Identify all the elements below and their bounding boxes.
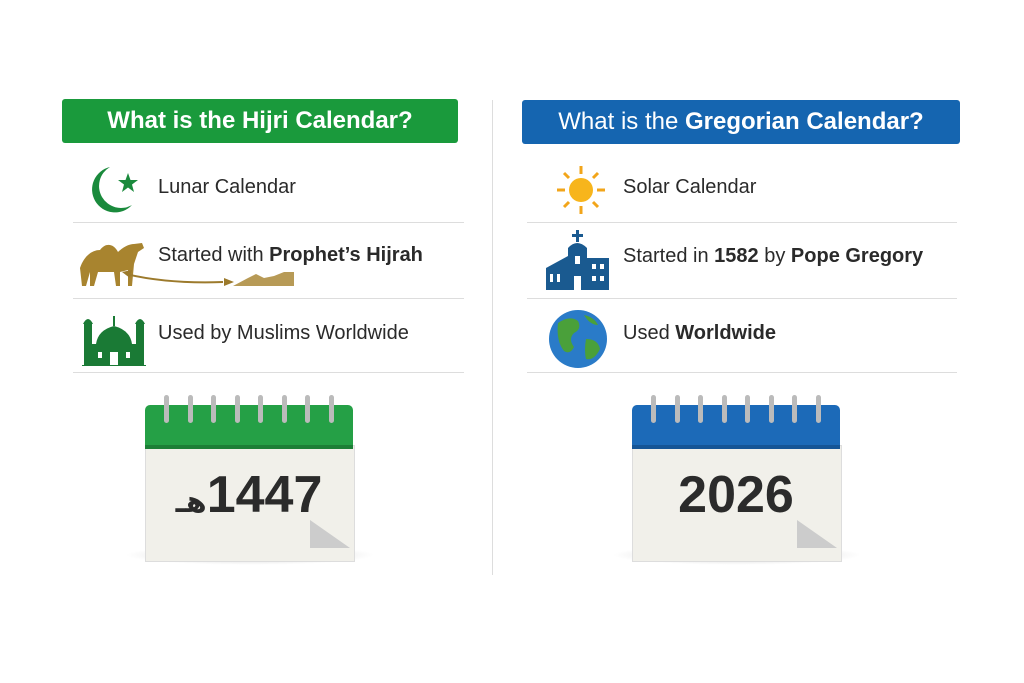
- icon: camel with arrow: [80, 243, 294, 286]
- text: muslims: Used by Muslims Worldwide: [158, 322, 409, 344]
- icon: globe: [549, 310, 607, 368]
- text: pope: Started in 1582 by Pope Gregory: [623, 245, 923, 267]
- text: solar: Solar Calendar: [623, 176, 756, 198]
- text: hijrah: Started with Prophet’s Hijrah: [158, 244, 423, 266]
- text: lunar: Lunar Calendar: [158, 176, 296, 198]
- icon: crescent and star: [92, 167, 138, 212]
- text: worldwide: Used Worldwide: [623, 322, 776, 344]
- heading: Gregorian: What is the Gregorian Calendar?: [558, 108, 924, 135]
- icon: sun: [557, 166, 605, 214]
- calendar: 1447: هـ1447: [176, 466, 322, 524]
- calendar: 2026: 2026: [678, 466, 794, 524]
- calendar: 1447: [145, 395, 355, 564]
- heading: Hijri: [62, 99, 458, 143]
- icon: church: [546, 230, 609, 290]
- calendar: 2026: [632, 395, 842, 564]
- heading: Hijri: What is the Hijri Calendar?: [107, 107, 413, 134]
- heading: Gregorian: [522, 100, 960, 144]
- icon: mosque: [82, 316, 146, 366]
